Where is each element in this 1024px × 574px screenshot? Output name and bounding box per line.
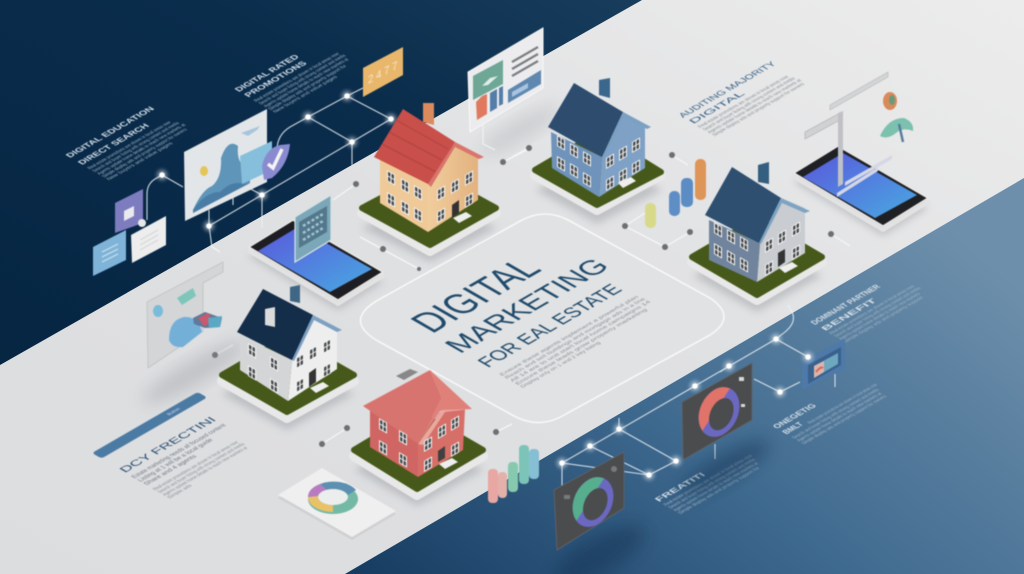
title: Digital Marketing for Real Estate (402, 252, 627, 371)
network connectors: lower right (562, 305, 835, 490)
central rounded title panel (360, 214, 724, 423)
floating chart panel (468, 28, 564, 161)
front chimney (265, 307, 275, 327)
network nodes: upper left (157, 91, 396, 231)
roof (237, 289, 313, 360)
text block: lower right top: Search and buyer listing with strong content and media (833, 286, 923, 338)
title panel body text: Display only on 1 and 2 key listing (519, 341, 603, 389)
pie chart card (278, 468, 396, 540)
walls (240, 335, 292, 401)
text block: upper left 1: Search and buyer listing with strong content and media (91, 121, 181, 173)
walls (380, 160, 428, 232)
text block: lower right middle: ONEGETIG (770, 402, 819, 430)
text block: upper left 2: Search and buyer listing with strong content and media (258, 54, 348, 106)
image panel with landscape (184, 109, 290, 221)
roof (363, 370, 442, 444)
bars: small chart centre (645, 159, 706, 228)
floating frames and icons over phone (805, 72, 913, 197)
text block: lower left: Real estate promotions are shown in local areas now (152, 440, 240, 492)
text block: upper left 1: Simple display ads and property support for owners (101, 128, 189, 179)
text block: lower left: Search and buyer listing with strong content and media (157, 442, 247, 494)
text block: upper right (676, 60, 810, 137)
lawn (535, 133, 661, 205)
pill label: Button (166, 407, 182, 416)
text block: upper left 1: Agents update home details to reach new markets at (96, 123, 188, 176)
text block: upper right: AUDITING MAJORITY (676, 60, 778, 119)
lawn (222, 337, 354, 412)
roof (548, 83, 623, 157)
title panel body text: Reach and sell buildings and mortgage ads in a line (504, 297, 648, 380)
house: tan with red roof (362, 103, 496, 251)
text block: lower centre: FREATITI (652, 471, 707, 503)
house: white with dark roof (222, 285, 354, 418)
text block: lower centre: Search and buyer listing with strong content and media (667, 458, 757, 510)
title panel body text: Ensure these agents implement a powerful plan (499, 295, 641, 377)
house: red (354, 369, 483, 495)
title panel body text: Ensure these leads grow property marketing (514, 308, 649, 386)
text block: lower left: Agents update home details to reach new markets at (161, 446, 250, 497)
text block: lower centre: Simple display ads and property support for (677, 466, 762, 515)
text block: lower right top: DOMINANT PARTNER (808, 283, 883, 326)
network connectors: upper left (147, 88, 391, 247)
text block: upper left 2: Real estate promotions are shown in local areas now (253, 52, 341, 103)
base (222, 342, 354, 418)
roof (374, 109, 455, 185)
walls (709, 220, 760, 282)
connector dots on the light band (212, 145, 850, 447)
windows (248, 338, 331, 394)
orange stat card (363, 47, 403, 97)
text block: lower centre: Real estate promotions are shown in local areas now (662, 454, 754, 507)
windows (714, 221, 800, 276)
text block: upper left 1: DIGITAL EDUCATION (63, 105, 157, 159)
chimney (758, 162, 769, 184)
text block: upper left 2: PROMOTIONS (242, 59, 309, 99)
text block: lower right middle: Search and buyer listing with strong content and media (791, 388, 881, 440)
text block: upper right: Real estate promotions are shown in local areas now (697, 75, 791, 129)
text block: lower left: Share and 4 agents (142, 454, 199, 487)
text block: upper left 2: DIGITAL RATED (232, 53, 301, 93)
text block: lower right middle: Real estate promotions are shown in local areas now (806, 383, 879, 425)
text block: lower left: Listing at 1 will be a local guide (136, 437, 215, 483)
text block: lower left (117, 415, 263, 500)
document cards icon (93, 189, 166, 276)
text block: lower right middle: Simple display ads and property support for owners (800, 394, 889, 446)
chimney (396, 369, 418, 380)
text block: lower left: Simple ads (166, 484, 194, 500)
house: blue (535, 78, 661, 210)
rear chimney (290, 285, 300, 303)
title panel body text: All 14 are to unit start local home campaigns 14 (509, 300, 653, 383)
background: blue lower panel (335, 170, 1024, 574)
windows (387, 170, 473, 223)
text block: upper right: Agents update home details to reach new markets at (706, 78, 804, 135)
small blue screen card (802, 339, 845, 390)
windows (557, 135, 640, 191)
text block: upper left 1: DIRECT SEARCH (75, 122, 151, 166)
text block: lower centre: Agents update home details to reach new markets at (672, 461, 761, 513)
floating tablet on phone (295, 195, 331, 262)
base (692, 224, 822, 300)
text block: upper right: Simple display ads and property support for owners (711, 82, 807, 137)
base shadows for houses (222, 155, 928, 506)
text block: lower left: Estate marketing needs all focused content (130, 423, 228, 480)
chimney (599, 78, 610, 98)
walls (551, 132, 602, 197)
text block: upper left 1: Real estate promotions are shown in local areas now (86, 120, 173, 171)
text block: upper right: DIGITAL (686, 90, 747, 125)
title line: DIGITAL: DIGITAL (402, 252, 551, 339)
text block: upper left 1: New buyers and value pages (106, 141, 175, 182)
pill label (92, 392, 207, 458)
lawn (692, 219, 822, 295)
base (535, 138, 661, 210)
base (354, 418, 483, 495)
title line: MARKETING: MARKETING (438, 254, 617, 358)
chimney (423, 103, 434, 125)
walls (370, 409, 418, 477)
text block: upper left 1 (63, 104, 198, 182)
network nodes: lower right (557, 334, 813, 480)
text block: lower right top: BENEFIT (818, 296, 880, 332)
icon: teal umbrella (880, 118, 913, 137)
text block: lower right top: Agents update home details to reach new markets (838, 292, 923, 341)
text block: lower right top: Simple display ads and property support (842, 295, 926, 344)
left floating panel with 3D icons (137, 262, 253, 412)
windows (379, 415, 459, 472)
lawn (354, 412, 483, 489)
house: slate grey (692, 162, 822, 300)
orange stat card: 2 4 7 7 (368, 59, 398, 87)
text block: upper left 2: Simple display ads and property support for (267, 64, 349, 111)
text block: upper left 2: Agents update home details to reach new markets at (262, 57, 351, 109)
title line: FOR EAL ESTATE: FOR EAL ESTATE (473, 281, 627, 371)
text block: lower right top: Real estate promotions are shown in local areas now (828, 284, 916, 336)
dark panel: green ring (548, 452, 652, 574)
icon: orange (883, 92, 897, 110)
phone left (249, 220, 383, 304)
text block: upper left 2: New buyers and value pages (272, 75, 340, 114)
title panel body text (499, 294, 663, 389)
dark panel: red ring (675, 363, 775, 505)
bars: pastel chart (488, 445, 539, 503)
base (362, 177, 496, 251)
text block: lower right middle: Agents update home details to reach new markets at (796, 392, 884, 443)
text block: upper right: Search and buyer listing with strong content and media (702, 77, 797, 132)
phone right (794, 146, 928, 230)
text block: lower left: DCY FRECTINI (117, 415, 219, 475)
text block: lower right middle: BMLT (780, 420, 806, 436)
lawn (362, 172, 496, 245)
roof (705, 167, 781, 243)
